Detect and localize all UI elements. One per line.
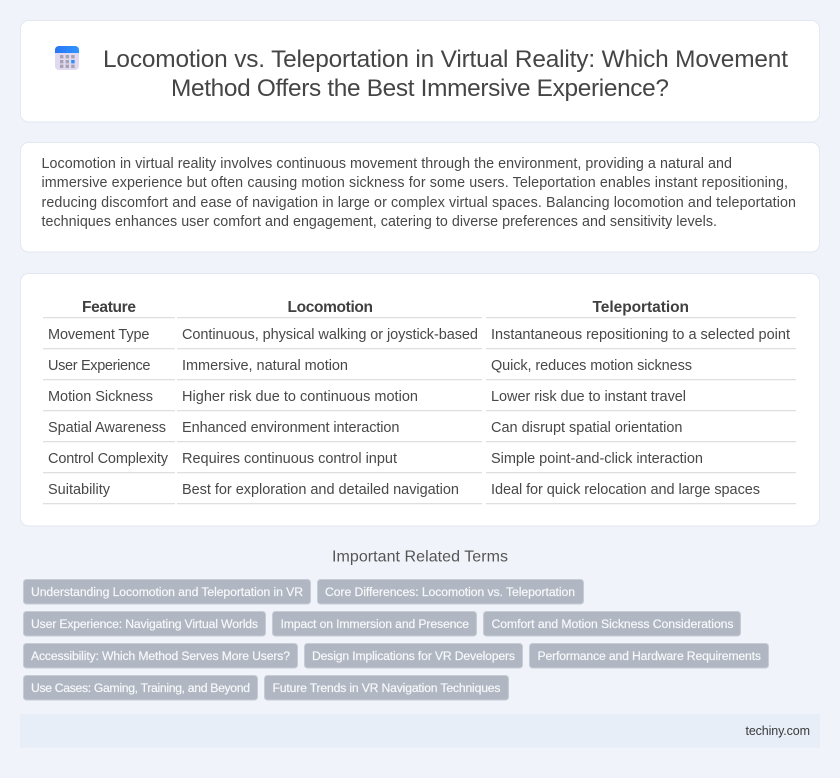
tag	[304, 644, 522, 668]
tag: Accessibility: Which Method Serves More Users?	[31, 649, 290, 663]
tag	[264, 676, 508, 700]
title: Method Offers the Best Immersive Experience?	[171, 75, 669, 102]
footer source text: techiny.com	[746, 724, 810, 738]
table row: user experience: Immersive, natural motion	[182, 358, 348, 374]
panel: related term tags	[24, 580, 768, 700]
tag	[484, 612, 740, 636]
table row: motion sickness: Motion Sickness	[48, 389, 153, 405]
panel: title header	[20, 20, 820, 122]
table row: spatial awareness: Spatial Awareness	[48, 420, 166, 436]
tag: Understanding Locomotion and Teleportation in VR	[31, 585, 303, 599]
footer	[20, 714, 820, 748]
table row: control complexity: Requires continuous control input	[182, 451, 397, 467]
table row: spatial awareness	[43, 420, 796, 442]
table row: control complexity: Control Complexity	[48, 451, 169, 467]
table header row: Teleportation	[592, 299, 689, 316]
tag: Use Cases: Gaming, Training, and Beyond	[31, 681, 250, 695]
table header row	[43, 299, 796, 318]
icon: calendar	[55, 46, 79, 70]
table row: movement type: Continuous, physical walking or joystick-based	[182, 327, 478, 343]
title: Locomotion vs. Teleportation in Virtual Reality: Which Movement	[103, 46, 788, 73]
table row: user experience	[43, 358, 796, 380]
table header row: Locomotion	[288, 299, 373, 316]
table row: motion sickness	[43, 389, 796, 411]
table row: spatial awareness: Enhanced environment interaction	[182, 420, 400, 436]
tag: User Experience: Navigating Virtual Worlds	[31, 617, 258, 631]
text block: intro: techniques enhances user comfort and engagement, catering to diverse preferences and sensitivity levels.	[42, 214, 717, 230]
table header row: Feature	[82, 299, 136, 316]
table row: suitability: Ideal for quick relocation and large spaces	[491, 482, 760, 498]
panel: intro paragraph	[20, 142, 820, 252]
text block: intro: immersive experience but often causing motion sickness for some users. Teleportation enables instant repositioning,	[42, 175, 788, 191]
tag: Comfort and Motion Sickness Considerations	[492, 617, 734, 631]
table row: suitability: Best for exploration and detailed navigation	[182, 482, 459, 498]
text block: intro: reducing discomfort and ease of navigation in large or complex virtual spaces. Balancing locomotion and teleportation	[42, 195, 796, 211]
table row: motion sickness: Lower risk due to instant travel	[491, 389, 686, 405]
heading: related terms: Important Related Terms	[332, 548, 508, 566]
table row: suitability	[43, 482, 796, 504]
table row: user experience: Quick, reduces motion sickness	[491, 358, 692, 374]
tag: Future Trends in VR Navigation Techniques	[272, 681, 500, 695]
title	[103, 46, 788, 102]
tag	[24, 580, 310, 604]
table row: user experience: User Experience	[48, 358, 150, 374]
tag: Core Differences: Locomotion vs. Teleportation	[325, 585, 575, 599]
tag	[272, 612, 476, 636]
table row: control complexity: Simple point-and-click interaction	[491, 451, 703, 467]
table row: movement type	[43, 327, 796, 349]
panel: comparison table	[20, 274, 820, 526]
table row: control complexity	[43, 451, 796, 473]
tag: Design Implications for VR Developers	[312, 649, 515, 663]
table row: suitability: Suitability	[48, 482, 111, 498]
tag	[318, 580, 584, 604]
table row: spatial awareness: Can disrupt spatial orientation	[491, 420, 682, 436]
table row: motion sickness: Higher risk due to continuous motion	[182, 389, 418, 405]
tag	[24, 612, 266, 636]
table row: movement type: Instantaneous repositioning to a selected point	[491, 327, 790, 343]
tag: Impact on Immersion and Presence	[280, 617, 469, 631]
tag: Performance and Hardware Requirements	[538, 649, 761, 663]
tag	[530, 644, 768, 668]
text block: intro	[42, 156, 796, 230]
tag	[24, 644, 298, 668]
tag	[24, 676, 258, 700]
text block: intro: Locomotion in virtual reality involves continuous movement through the environment, providing a natural and	[42, 156, 732, 172]
table row: movement type: Movement Type	[48, 327, 150, 343]
